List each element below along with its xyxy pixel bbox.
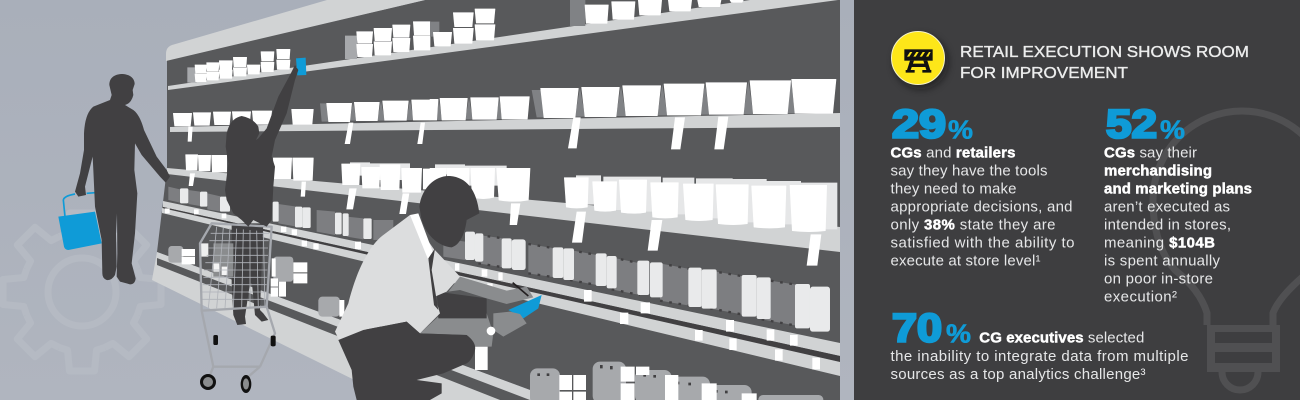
icon: blue tag held by woman — [296, 58, 306, 75]
base kick — [152, 252, 557, 400]
stat: 52 percent — [1104, 103, 1252, 306]
stat: 29 percent: execute at store level¹ — [890, 252, 1040, 270]
cart wheels — [200, 335, 276, 393]
bottle held on shelf — [475, 347, 488, 370]
packs on shelf 4, right part — [443, 235, 798, 326]
icon: blue basket — [58, 193, 102, 250]
stat: 70 percent: 70 — [892, 307, 942, 351]
figure: woman with cart — [200, 58, 306, 393]
woman legs — [232, 223, 268, 325]
shelving unit — [152, 0, 840, 400]
shelf 3 — [167, 168, 840, 252]
shelf 4 rail — [163, 201, 840, 356]
stat: 29 percent: % — [948, 115, 973, 145]
stat: 70 percent — [890, 307, 1188, 383]
shelf 3 tubs, right part — [435, 164, 837, 229]
stat: 52 percent: aren’t executed as — [1104, 198, 1230, 216]
stat: 29 percent — [890, 103, 1074, 270]
top cap — [166, 0, 425, 61]
products: top shelf and upper tubs, left part — [165, 22, 430, 317]
stat: 52 percent: is spent annually — [1104, 252, 1220, 270]
stat: 29 percent: appropriate decisions, and — [890, 198, 1072, 216]
shelf labels, right part — [510, 117, 821, 266]
stat: 29 percent: satisfied with the ability to — [890, 234, 1074, 252]
heading: FOR IMPROVEMENT — [960, 65, 1128, 82]
shelf 2 tubs — [320, 100, 414, 122]
stat: 29 percent: they need to make — [890, 180, 1016, 198]
rail tags, right part — [455, 263, 820, 369]
stat: 52 percent: CGs say their — [1104, 144, 1197, 162]
stat: 29 percent: 29 — [892, 103, 946, 147]
apron — [437, 292, 487, 318]
background wall and floor — [0, 0, 854, 400]
packs on shelf 4, left part — [168, 187, 393, 240]
stat: 70 percent: % — [946, 319, 971, 349]
shelf 3 tubs — [350, 162, 410, 180]
stat: 52 percent: intended in stores, — [1104, 216, 1231, 234]
shelf 2 tubs, right part — [430, 79, 836, 120]
icon: blue tablet — [508, 295, 542, 318]
figure: man with basket — [58, 74, 170, 284]
panel: dark text panel — [854, 0, 1300, 400]
collar — [410, 213, 433, 260]
shelf labels, left part — [188, 123, 425, 214]
stat: 52 percent: on poor in-store — [1104, 270, 1213, 288]
shelf back panel — [157, 0, 840, 400]
shopping cart — [200, 223, 275, 377]
watch — [487, 327, 495, 335]
shelf 1 — [168, 0, 838, 90]
stat: 70 percent: CG executives selected — [979, 330, 1144, 346]
icon: background light bulb — [1153, 111, 1300, 390]
shelf 2 — [170, 113, 840, 132]
stat: 52 percent: % — [1160, 115, 1185, 145]
strap — [428, 248, 438, 310]
stat: 70 percent: the inability to integrate data from multiple — [890, 348, 1188, 365]
trousers — [338, 322, 475, 400]
upper arm — [448, 277, 533, 304]
stat: 52 percent: meaning $104B — [1104, 234, 1215, 252]
lower shelf packs, right part — [530, 362, 823, 400]
products: upper and middle shelves, right part — [430, 0, 837, 400]
stat: 70 percent: sources as a top analytics challenge³ — [890, 366, 1146, 383]
man silhouette — [75, 74, 170, 284]
stat: 52 percent: merchandising — [1104, 162, 1212, 180]
icon: background gear — [3, 213, 161, 371]
stat: 52 percent: and marketing plans — [1104, 180, 1252, 198]
stat: 29 percent: say they have the tools — [890, 162, 1048, 180]
head — [419, 176, 479, 247]
cart contents — [213, 243, 233, 277]
stat: 29 percent: CGs and retailers — [890, 144, 1016, 162]
heading: RETAIL EXECUTION SHOWS ROOM — [960, 44, 1249, 61]
pack tick marks — [478, 235, 798, 326]
pen — [513, 283, 528, 296]
rail tags, left part — [165, 208, 361, 249]
stat: 52 percent: 52 — [1106, 103, 1157, 147]
hand — [493, 312, 527, 337]
icon: yellow roadblock badge — [892, 32, 948, 89]
woman silhouette — [225, 65, 298, 227]
man arm lower — [420, 313, 493, 347]
lower shelf products, left part — [168, 246, 183, 263]
stat: 29 percent: only 38% state they are — [890, 216, 1056, 234]
figure: crouching man with tablet — [335, 176, 542, 400]
shirt — [335, 215, 460, 342]
stat: 52 percent: execution² — [1104, 288, 1177, 306]
